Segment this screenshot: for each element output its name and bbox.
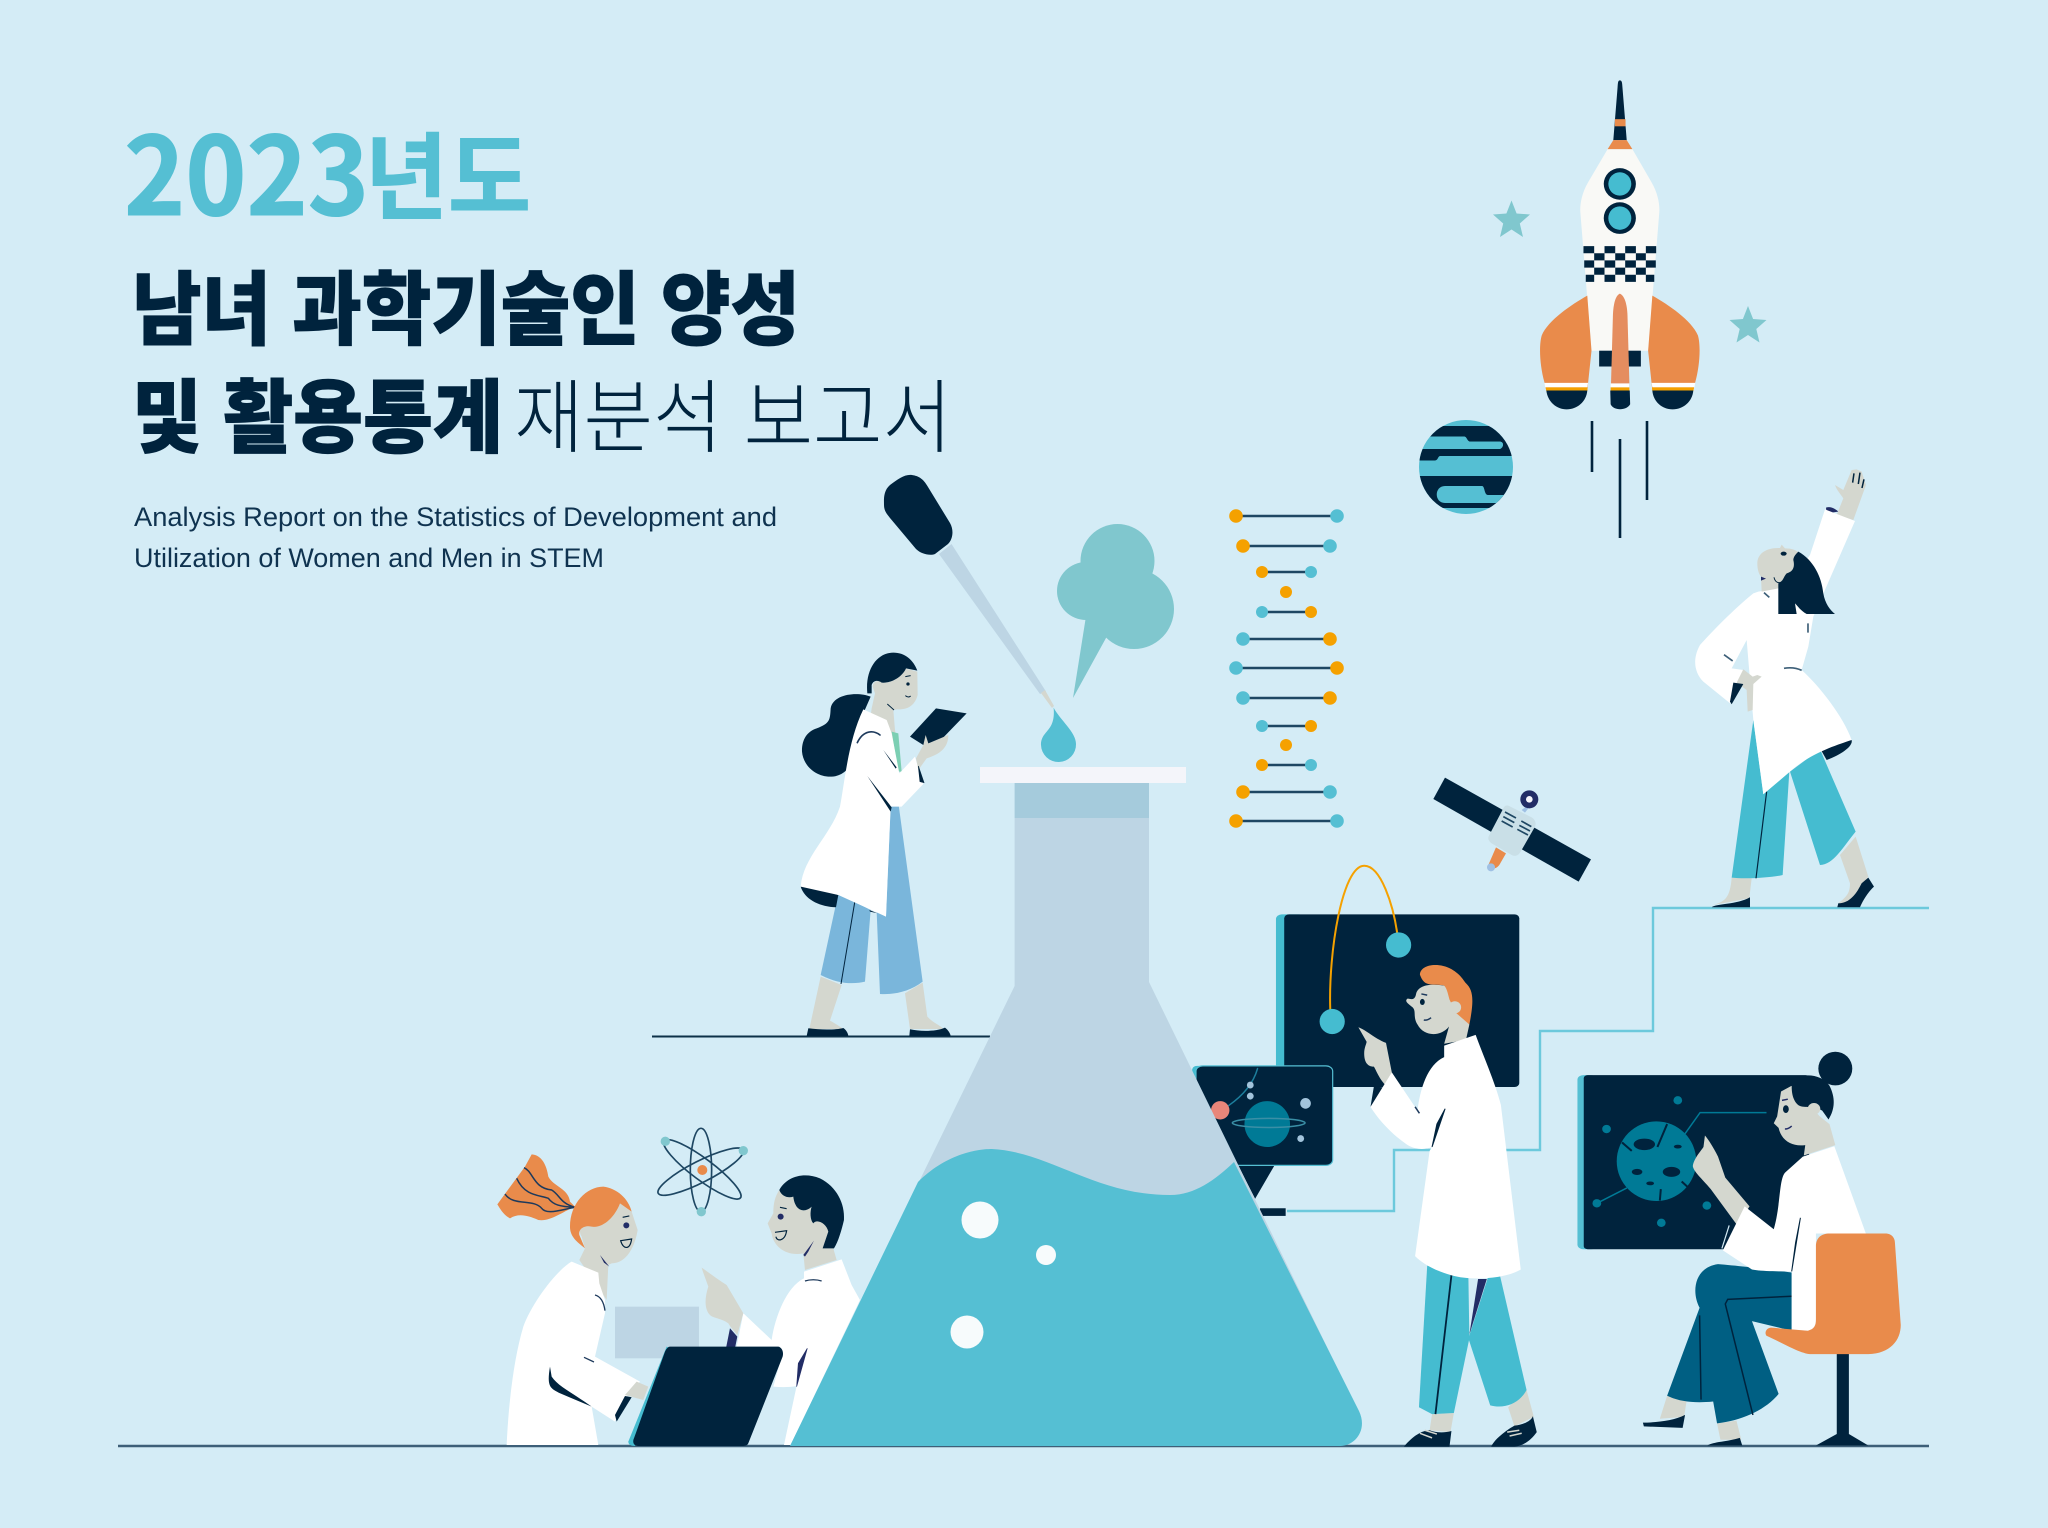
screen with planet (1577, 1075, 1809, 1249)
year heading: 2023 (124, 91, 369, 247)
floor lines and stair line (118, 908, 1929, 1446)
scientist: woman reaching up (1695, 469, 1874, 907)
cloud (1057, 524, 1174, 698)
scientist: woman with clipboard (801, 653, 967, 1036)
title line 1: 남녀 과학기술인 양성 (132, 246, 800, 362)
english subtitle: Analysis Report on the Statistics of Development and (134, 502, 777, 532)
pipette (884, 475, 1054, 708)
scientist: man pointing with tablet (702, 1175, 860, 1445)
scientist: man at monitor (1358, 965, 1537, 1447)
atom icon (653, 1128, 748, 1216)
rocket (1540, 80, 1700, 409)
large monitor (1276, 866, 1519, 1087)
english subtitle (134, 502, 777, 573)
tablet (628, 1347, 783, 1446)
english subtitle: Utilization of Women and Men in STEM (134, 543, 604, 573)
flask (790, 767, 1362, 1446)
dna helix (1229, 509, 1344, 828)
small monitor (1192, 1066, 1333, 1216)
title line 2: 재분석 보고서 (514, 354, 952, 470)
year heading: 년도 (365, 103, 531, 239)
scientist: woman at laptop (497, 1154, 699, 1445)
stars (1493, 200, 1766, 342)
satellite (1433, 778, 1591, 882)
rocket exhaust lines (1592, 421, 1647, 538)
title line 2: 및 활용통계 (132, 354, 503, 470)
water drop (1041, 708, 1076, 762)
planet (1419, 420, 1513, 514)
scientist: seated woman and chair (1643, 1052, 1901, 1446)
